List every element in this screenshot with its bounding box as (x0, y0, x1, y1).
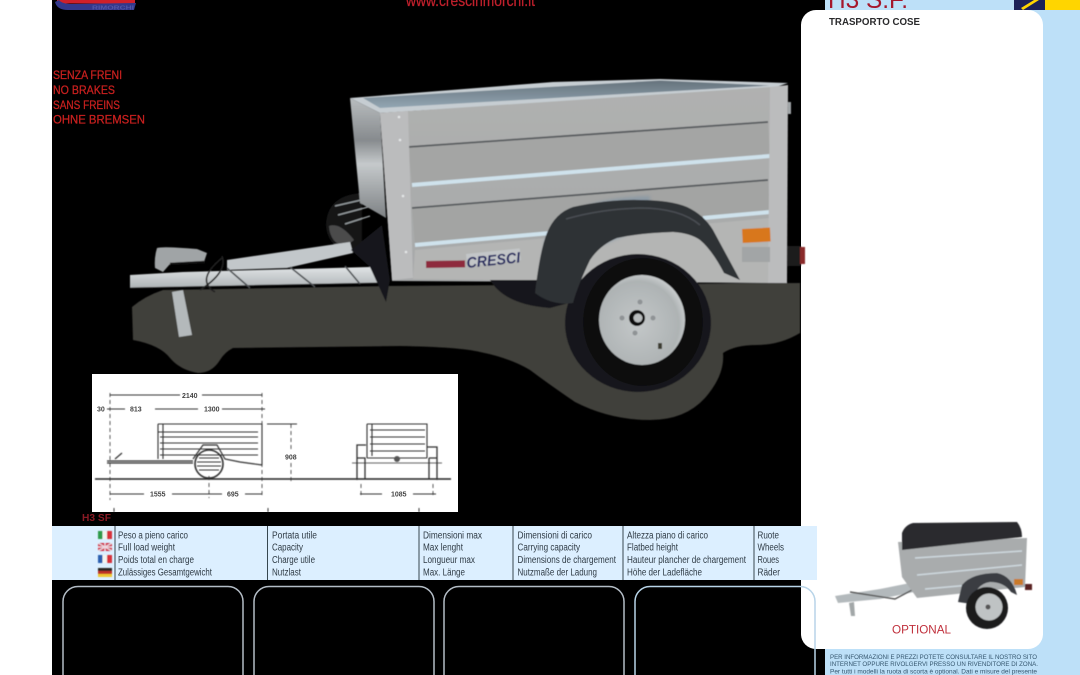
small box (898, 538, 1027, 598)
side panel (350, 98, 386, 218)
footer note: INTERNET OPPURE RIVOLGERVI PRESSO UN RIVENDITORE DI ZONA. (830, 661, 1038, 668)
column 6: Ruote (758, 530, 779, 542)
logo: cresci rimorchi (55, 0, 136, 12)
diagram: technical drawing: 695 (227, 492, 239, 498)
column 3 (423, 530, 482, 578)
column 2: Nutzlast (272, 568, 301, 578)
column 3: Dimensioni max (423, 530, 482, 542)
column 5 (627, 530, 746, 578)
chassis struts (351, 225, 390, 302)
column 5: Höhe der Ladefläche (627, 568, 702, 578)
rear wheel behind trailer (326, 193, 372, 250)
column 3: Max. Länge (423, 568, 465, 578)
rim (599, 275, 685, 365)
lower panel highlight (413, 218, 770, 283)
small fender (958, 573, 1017, 604)
groove lines (408, 122, 768, 208)
icon: corner brand mark (1014, 0, 1080, 10)
column 6 (758, 530, 784, 578)
side view wheel (195, 450, 223, 478)
label: optional: OPTIONAL (892, 624, 952, 636)
left post (380, 111, 413, 280)
small light (1014, 579, 1023, 585)
rivets (398, 116, 407, 253)
diagram: technical drawing: 813 (130, 406, 142, 414)
column 1: Peso a pieno carico (118, 530, 188, 542)
brand sticker (426, 248, 522, 272)
ground lines (95, 478, 451, 480)
column 4: Carrying capacity (518, 542, 580, 554)
logo: cresci rimorchi: RIMORCHI (92, 6, 135, 12)
text: no brakes labels: SANS FREINS (53, 100, 120, 112)
card: spec box 4 (635, 586, 815, 675)
black main area (52, 0, 825, 675)
label: H3 SF: H3 SF (82, 512, 112, 524)
small lid (902, 522, 1022, 550)
heading: trasporto cose: TRASPORTO COSE (829, 16, 920, 28)
dimension lines (107, 395, 436, 494)
text: no brakes labels (53, 70, 145, 126)
table: specification headers (52, 526, 817, 580)
footer note: PER INFORMAZIONI E PREZZI POTETE CONSULTARE IL NOSTRO SITO (830, 654, 1037, 661)
small wheel (966, 587, 1008, 629)
column 2: Portata utile (272, 530, 317, 542)
front view box (367, 424, 427, 458)
column 5: Altezza piano di carico (627, 530, 708, 542)
column 6: Wheels (758, 542, 784, 554)
optional trailer photo (835, 522, 1032, 629)
text: no brakes labels: SENZA FRENI (53, 70, 122, 82)
fender haze (540, 196, 650, 275)
column 2: Capacity (272, 542, 303, 554)
jockey stand (172, 290, 192, 337)
hub (620, 300, 662, 349)
diagram: technical drawing: 908 (285, 454, 297, 462)
diagram: technical drawing: 1300 (204, 406, 220, 414)
column 2 (272, 530, 317, 578)
column 1: Poids total en charge (118, 555, 194, 566)
diagram: technical drawing: 1085 (391, 492, 407, 498)
column 5: Flatbed height (627, 542, 678, 554)
drawbar (130, 242, 380, 292)
front view fenders wheels (357, 445, 437, 480)
side view box (158, 424, 262, 465)
card: spec box 3 (444, 586, 624, 675)
diagram: technical drawing: 30 (97, 406, 105, 414)
column 1: Zulässiges Gesamtgewicht (118, 568, 212, 578)
column 4: Nutzmaße der Ladung (518, 568, 597, 578)
light blue side band (825, 0, 1080, 675)
diagram: technical drawing (92, 374, 458, 512)
panel recess (408, 122, 770, 185)
ground shadow (132, 283, 800, 420)
right post (768, 85, 788, 283)
card: spec box 2 (254, 586, 434, 675)
rear light (742, 102, 805, 266)
small drawbar (835, 583, 914, 603)
main side panel (380, 87, 787, 283)
diagram: technical drawing: 1555 (150, 492, 166, 498)
column 4: Dimensioni di carico (518, 530, 592, 542)
column 1: Full load weight (118, 542, 175, 554)
diagram: technical drawing: 2140 (182, 393, 198, 400)
tyre (565, 254, 711, 392)
column 3: Longueur max (423, 555, 475, 566)
fender (535, 200, 740, 304)
tub interior (350, 79, 788, 113)
column 4: Dimensions de chargement (518, 555, 616, 566)
side view drawbar (107, 445, 262, 465)
column 6: Räder (758, 568, 781, 578)
brand sticker: CRESCI (466, 249, 522, 272)
column 5: Hauteur plancher de chargement (627, 555, 746, 566)
column 2: Charge utile (272, 555, 315, 566)
text: no brakes labels: OHNE BREMSEN (53, 114, 145, 126)
column 6: Roues (758, 555, 779, 566)
coupling (155, 247, 207, 272)
text: no brakes labels: NO BRAKES (53, 85, 115, 97)
light strips (412, 156, 770, 245)
flags (98, 531, 112, 577)
column 4 (518, 530, 616, 578)
footer note (830, 654, 1038, 675)
column 1 (118, 530, 212, 578)
trailer photo (130, 79, 805, 420)
panel: white product panel (801, 10, 1043, 649)
chassis below box (490, 280, 580, 308)
card: spec box 1 (63, 586, 243, 675)
column 3: Max lenght (423, 542, 463, 554)
